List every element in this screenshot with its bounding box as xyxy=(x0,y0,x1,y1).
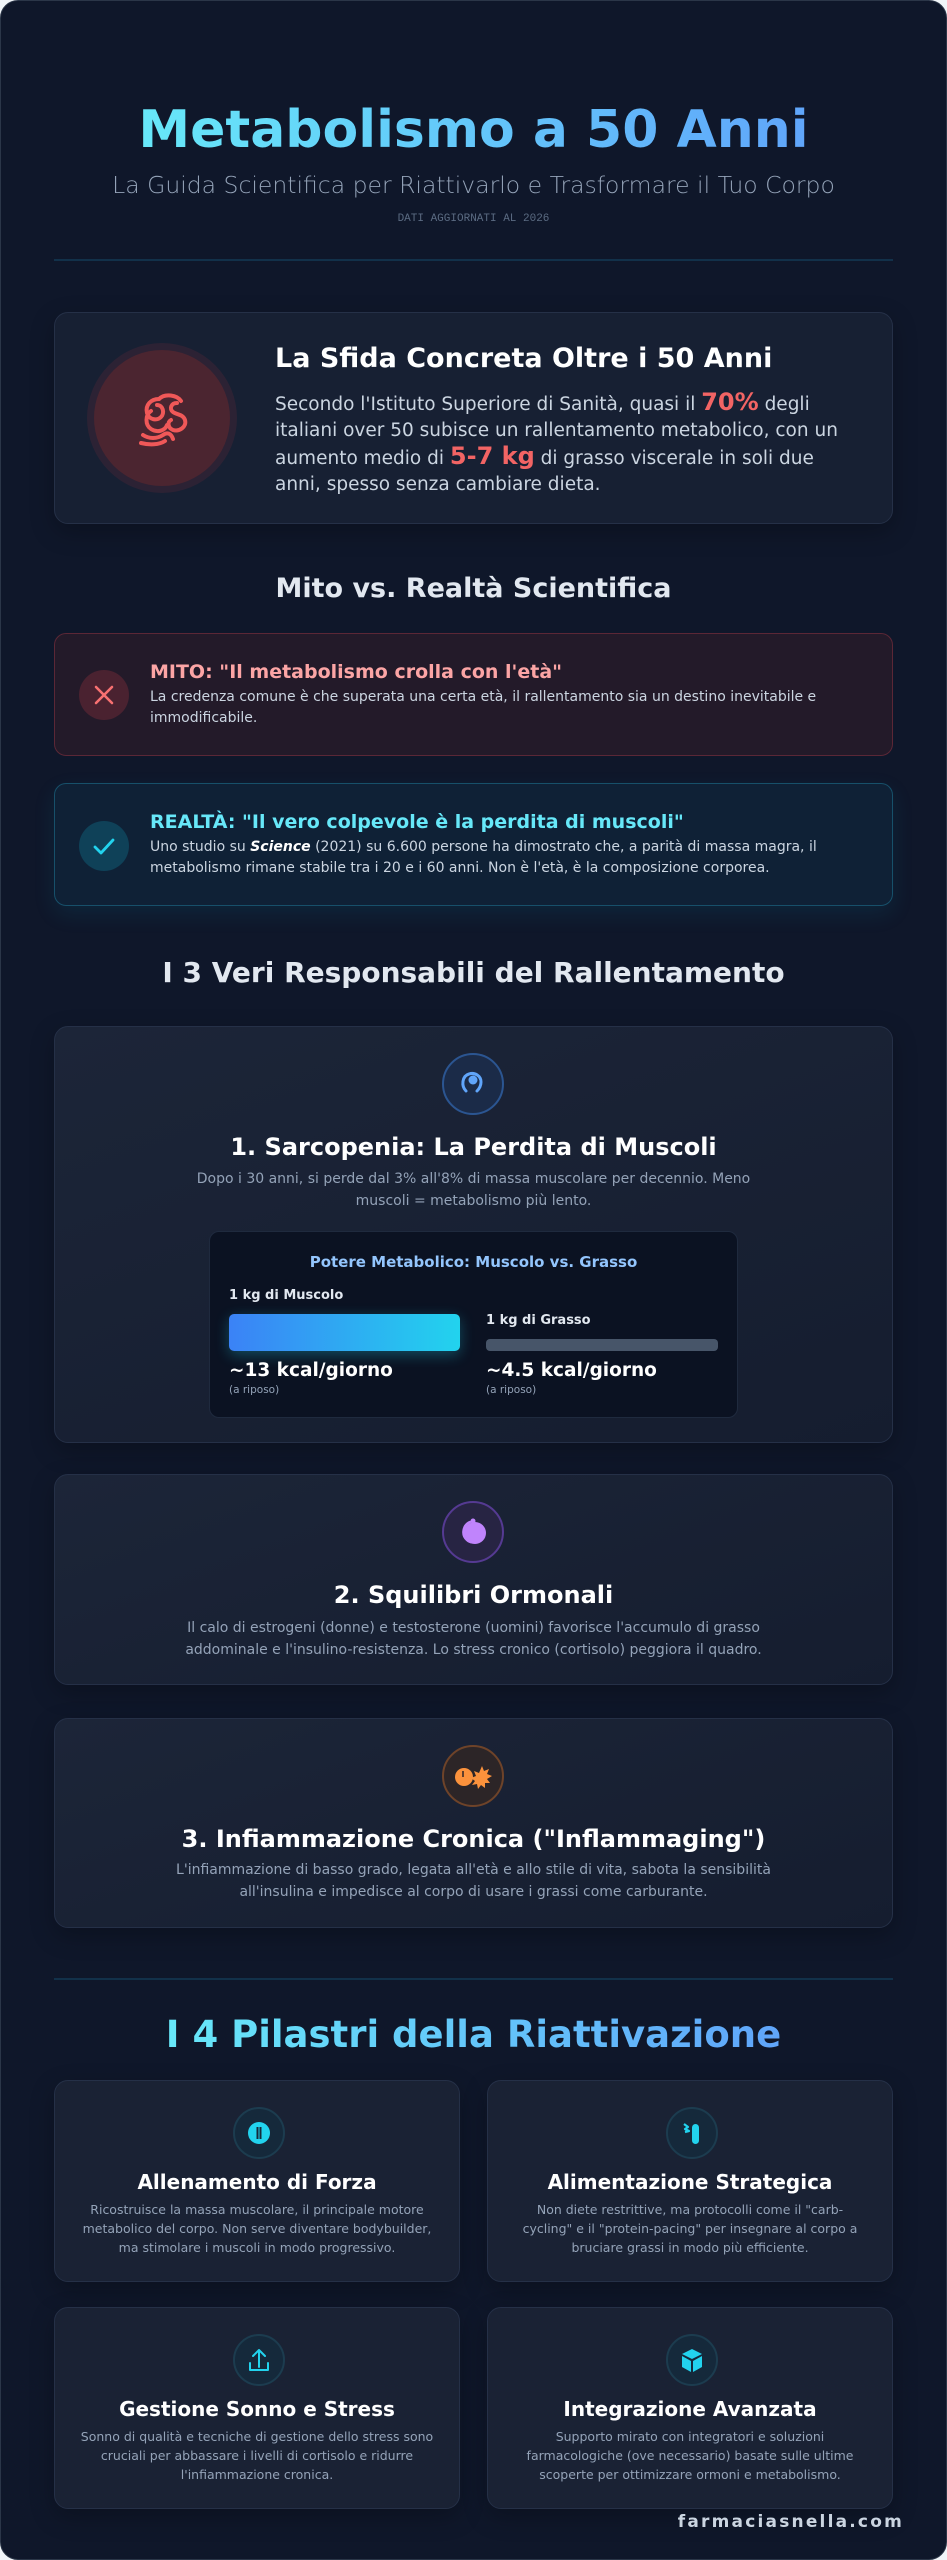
chart title: Potere Metabolico: Muscolo vs. Grasso xyxy=(310,1253,637,1271)
panel: reality xyxy=(54,783,893,906)
panel: nutrition xyxy=(487,2080,893,2282)
heading: 3 causes: I 3 Veri Responsabili del Rallentamento xyxy=(162,956,785,989)
text: strength: Ricostruisce la massa muscolare, il principale motore metabolico del corpo. Non serve diventare bodybuilder, ma stimolare i muscoli in modo progressivo. xyxy=(83,2202,431,2255)
text: myth: La credenza comune è che superata una certa età, il rallentamento sia un destino inevitabile e immodificabile. xyxy=(150,689,816,726)
bar: fat: (a riposo) xyxy=(486,1384,536,1396)
heading: challenge: La Sfida Concreta Oltre i 50 Anni xyxy=(275,343,772,374)
panel: hormones xyxy=(54,1474,893,1685)
title: Metabolismo a 50 Anni xyxy=(138,100,809,160)
icon: muscle xyxy=(442,1053,504,1115)
text: supplements: Supporto mirato con integratori e soluzioni farmacologiche (ove necessario) basate sulle ultime scoperte per ottimizzare ormoni e metabolismo. xyxy=(527,2429,853,2482)
panel: inflammation xyxy=(54,1718,893,1928)
bar: fat: 1 kg di Grasso xyxy=(486,1313,591,1328)
subtitle: La Guida Scientifica per Riattivarlo e Trasformare il Tuo Corpo xyxy=(112,171,835,199)
text: reality: REALTÀ: "Il vero colpevole è la perdita di muscoli" xyxy=(150,811,684,833)
text: sarcopenia: Dopo i 30 anni, si perde dal 3% all'8% di massa muscolare per decennio. Meno muscoli = metabolismo più lento. xyxy=(197,1171,750,1209)
text: inflammation: L'infiammazione di basso grado, legata all'età e allo stile di vita, sabota la sensibilità all'insulina e impedisce al corpo di usare i grassi come carburante. xyxy=(176,1862,771,1900)
text: nutrition: Non diete restrittive, ma protocolli come il "carb-cycling" e il "protein-pacing" per insegnare al corpo a bruciare grassi in modo più efficiente. xyxy=(523,2202,857,2255)
text: hormones: Il calo di estrogeni (donne) e testosterone (uomini) favorisce l'accumulo di grasso addominale e l'insulino-resistenza. Lo stress cronico (cortisolo) peggiora il quadro. xyxy=(185,1620,762,1658)
heading: sarcopenia: 1. Sarcopenia: La Perdita di Muscoli xyxy=(230,1133,717,1161)
bar: muscle: ~13 kcal/giorno xyxy=(229,1360,393,1381)
text: sleep: Sonno di qualità e tecniche di gestione dello stress sono cruciali per abbassare i livelli di cortisolo e ridurre l'infiammazione cronica. xyxy=(81,2429,433,2482)
bar: fat: ~4.5 kcal/giorno xyxy=(486,1360,657,1381)
icon: inflammation xyxy=(442,1745,504,1807)
text: reality: Uno studio su Science (2021) su 6.600 persone ha dimostrato che, a parità di massa magra, il metabolismo rimane stabile tra i 20 e i 60 anni. Non è l'età, è la composizione corporea. xyxy=(150,839,817,876)
bar: fat xyxy=(486,1313,718,1396)
text: myth xyxy=(150,661,816,726)
icon: strength xyxy=(233,2107,285,2159)
panel: supplements xyxy=(487,2307,893,2509)
bar: muscle: 1 kg di Muscolo xyxy=(229,1288,343,1303)
date note: DATI AGGIORNATI AL 2026 xyxy=(398,213,549,225)
icon: cross xyxy=(79,670,129,720)
heading: 4 pillars: I 4 Pilastri della Riattivazione xyxy=(166,2013,781,2056)
bar: muscle: (a riposo) xyxy=(229,1384,279,1396)
text: challenge: Secondo l'Istituto Superiore di Sanità, quasi il 70% degli italiani over 50 subisce un rallentamento metabolico, con un aumento medio di 5-7 kg di grasso viscerale in soli due anni, spesso senza cambiare dieta. xyxy=(275,388,838,495)
panel: sleep and stress xyxy=(54,2307,460,2509)
text: reality xyxy=(150,810,817,876)
panel: myth xyxy=(54,633,893,756)
heading: supplements: Integrazione Avanzata xyxy=(563,2397,817,2421)
heading: strength: Allenamento di Forza xyxy=(137,2170,377,2194)
heading: inflammation: 3. Infiammazione Cronica ("Inflammaging") xyxy=(182,1825,765,1853)
icon: hormones xyxy=(442,1501,504,1563)
heading: hormones: 2. Squilibri Ormonali xyxy=(334,1581,613,1609)
panel: sarcopenia xyxy=(54,1026,893,1443)
heading: sleep: Gestione Sonno e Stress xyxy=(119,2397,395,2421)
text: myth: MITO: "Il metabolismo crolla con l'età" xyxy=(150,661,562,683)
heading: nutrition: Alimentazione Strategica xyxy=(548,2170,832,2194)
icon: nutrition xyxy=(666,2107,718,2159)
icon: intestine xyxy=(87,343,237,493)
footer: brand: farmaciasnella.com xyxy=(678,2512,904,2532)
icon: cube xyxy=(666,2334,718,2386)
chart: muscle vs fat xyxy=(209,1231,738,1418)
heading: myth vs reality: Mito vs. Realtà Scientifica xyxy=(275,573,672,604)
icon: sleep xyxy=(233,2334,285,2386)
bar: muscle xyxy=(222,1288,467,1396)
panel: challenge xyxy=(54,312,893,524)
icon: check xyxy=(79,821,129,871)
panel: strength training xyxy=(54,2080,460,2282)
